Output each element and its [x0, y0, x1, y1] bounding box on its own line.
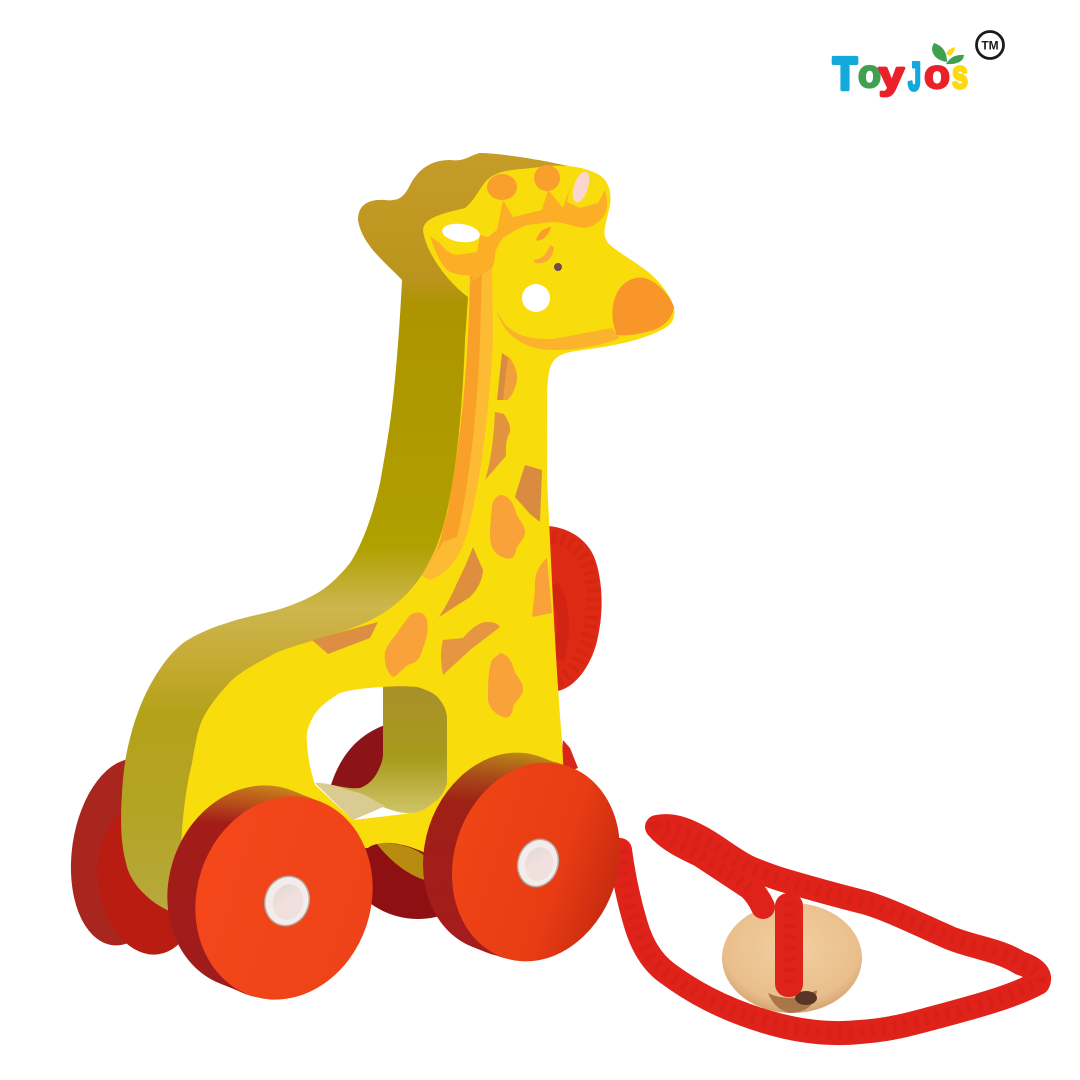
brand logo — [833, 32, 1004, 100]
ear white patch — [441, 221, 481, 245]
logo wordmark: o — [858, 53, 881, 96]
neck spots — [312, 353, 552, 718]
crown knob left — [487, 174, 517, 200]
white cheek dot — [522, 284, 550, 312]
orange snout — [612, 278, 674, 335]
eyebrow mark — [536, 227, 551, 241]
logo wordmark: o — [924, 51, 950, 97]
body hole — [307, 686, 447, 820]
eye smile mark — [533, 245, 554, 263]
wheel rim — [398, 731, 641, 982]
hole inner edge — [315, 686, 447, 820]
rope piece behind right wheel — [560, 740, 578, 775]
front left wheel — [141, 762, 399, 1023]
wheel face — [169, 773, 399, 1023]
giraffe front face — [180, 165, 674, 860]
logo wordmark: J — [908, 55, 921, 99]
smile stripe — [497, 310, 620, 350]
rope coil behind neck — [548, 526, 602, 691]
axle cap — [258, 870, 316, 932]
wheel rim — [141, 762, 395, 1022]
front right wheel — [398, 731, 645, 983]
logo wordmark: y — [879, 55, 904, 97]
eye dot — [554, 263, 562, 271]
wooden bead — [722, 903, 862, 1013]
trademark badge: TM — [981, 38, 999, 52]
giraffe side edge — [121, 153, 600, 920]
neck stripe — [422, 268, 493, 580]
wheel face — [427, 741, 645, 983]
logo wordmark — [833, 48, 968, 100]
bead cord strap — [775, 893, 803, 997]
rear right wheel — [330, 725, 506, 919]
head crown and ear marking — [430, 187, 607, 283]
axle cap — [512, 834, 564, 892]
logo wordmark: s — [952, 53, 968, 97]
crown knob center — [534, 165, 560, 191]
hole floor highlight — [315, 783, 385, 820]
trademark badge — [976, 32, 1004, 58]
crown knob right — [569, 170, 593, 204]
rear wheel seen through hole — [330, 725, 385, 790]
logo wordmark: T — [833, 48, 857, 100]
lower side piece under belly — [376, 843, 425, 880]
pull cord — [620, 826, 1039, 1033]
yellow body — [180, 166, 674, 860]
rear left wheel — [59, 752, 208, 961]
logo leaves — [932, 43, 964, 64]
